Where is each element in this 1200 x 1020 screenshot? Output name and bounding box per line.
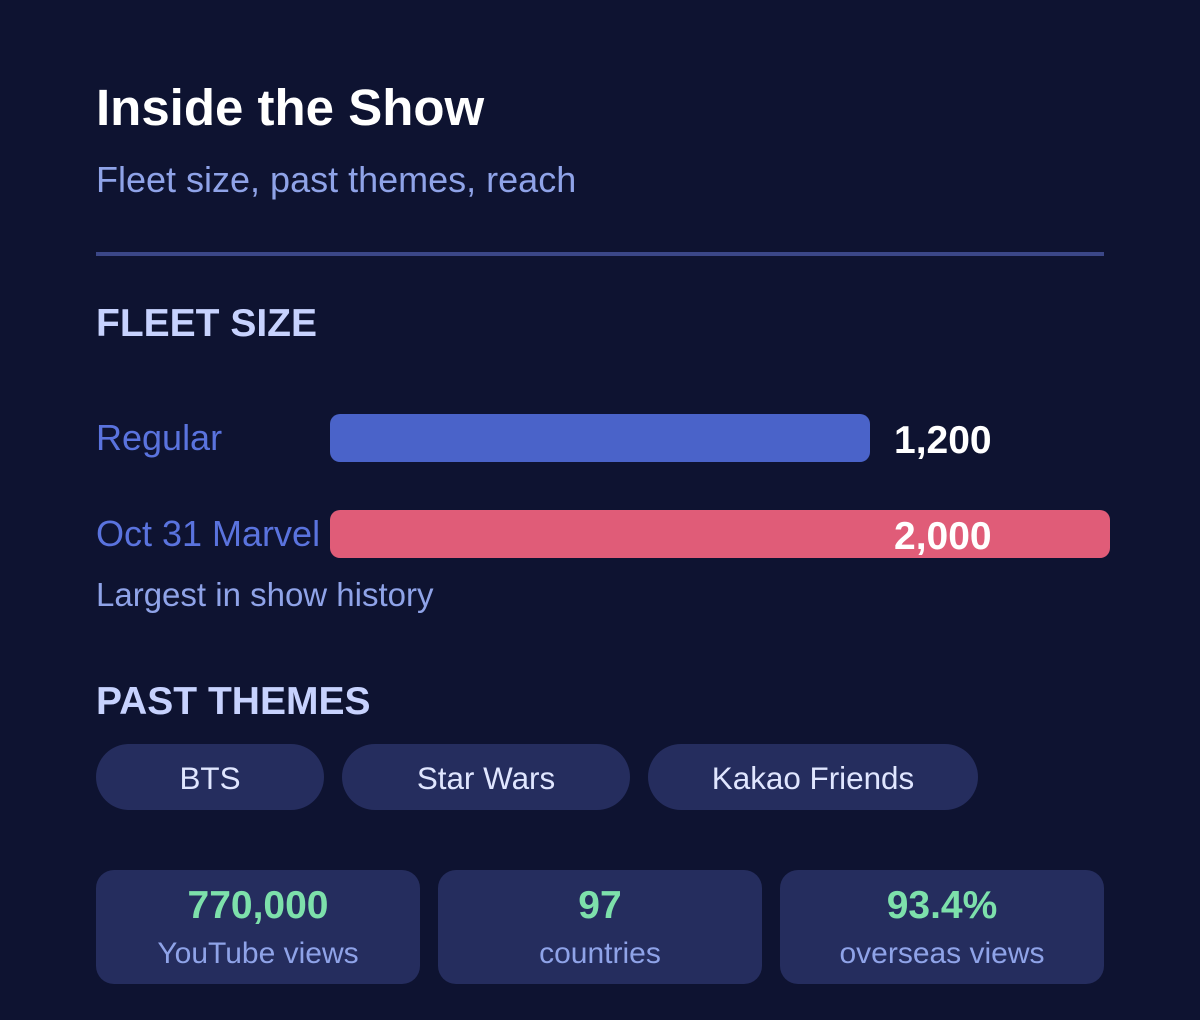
value: oct 31 marvel: 2,000 — [894, 515, 992, 558]
stat value: 93.4% — [887, 884, 997, 927]
pill: BTS: BTS — [179, 761, 241, 796]
bar: regular — [330, 414, 870, 462]
pill: Kakao Friends: Kakao Friends — [712, 761, 914, 796]
heading: past themes: PAST THEMES — [96, 680, 370, 723]
stat label: overseas views — [839, 937, 1045, 970]
title: Inside the Show — [96, 79, 484, 136]
pill: BTS — [96, 744, 324, 810]
pill: Star Wars: Star Wars — [417, 761, 555, 796]
value: regular: 1,200 — [894, 419, 992, 462]
stat card: youtube views — [96, 870, 420, 984]
label: oct 31 marvel: Oct 31 Marvel — [96, 513, 320, 554]
label: regular: Regular — [96, 417, 222, 458]
stat label: YouTube views — [157, 937, 359, 970]
stat label: countries — [539, 937, 661, 970]
pill: Kakao Friends — [648, 744, 978, 810]
stat value: 97 — [578, 884, 622, 927]
note: Largest in show history — [96, 576, 434, 613]
heading: fleet size: FLEET SIZE — [96, 302, 317, 345]
stat card: countries — [438, 870, 762, 984]
pill: Star Wars — [342, 744, 630, 810]
stat value: 770,000 — [188, 884, 328, 927]
subtitle: Fleet size, past themes, reach — [96, 159, 576, 200]
stat card: overseas views — [780, 870, 1104, 984]
bar: oct 31 marvel — [330, 510, 1110, 558]
